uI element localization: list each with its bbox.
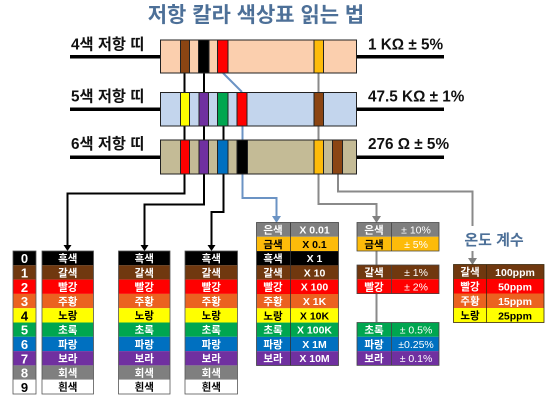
color table 2: 초록 — [135, 324, 154, 336]
tolerance table: 빨강 — [364, 281, 384, 293]
color table 3: 갈색 — [202, 266, 221, 279]
connector lines: blue multiplier — [223, 73, 281, 223]
color table 3: 보라 — [202, 352, 221, 365]
color table 2: 흰색 — [135, 382, 154, 394]
tolerance table: ± 2% — [404, 281, 428, 293]
multiplier table: X 10K — [300, 310, 330, 322]
color table 2: 주황 — [135, 296, 154, 308]
tolerance table: 초록 — [364, 324, 384, 336]
color table 1: 노랑 — [58, 310, 78, 322]
tolerance table: 파랑 — [364, 338, 384, 351]
6-band resistor — [70, 140, 444, 174]
color table 3: 노랑 — [202, 310, 221, 322]
digit column — [13, 251, 36, 395]
color table 3: 초록 — [202, 324, 221, 336]
6-band value: 276 Ω ± 5% — [368, 136, 449, 153]
temperature coefficient table: 25ppm — [498, 310, 532, 322]
color table 2: 흑색 — [135, 252, 154, 265]
color table 3 — [185, 251, 238, 394]
multiplier table: 초록 — [263, 325, 283, 337]
digit column: 9 — [21, 380, 28, 395]
title: 저항 칼라 색상표 읽는 법 — [148, 4, 364, 27]
tolerance table: ± 1% — [404, 267, 428, 279]
multiplier table: X 1K — [303, 296, 327, 308]
multiplier table: 빨강 — [263, 282, 283, 294]
tolerance table: 금색 — [364, 239, 384, 251]
connector lines: gray tolerance — [318, 73, 381, 322]
color table 1 — [42, 251, 94, 394]
color table 1: 주황 — [58, 296, 78, 308]
4-band label: 4색 저항 띠 — [71, 36, 144, 54]
tolerance table: ± 10% — [401, 224, 431, 236]
5-band resistor — [70, 92, 444, 126]
tolerance table: ± 0.5% — [400, 324, 432, 336]
tolerance table: 갈색 — [364, 266, 384, 279]
tolerance table: 은색 — [364, 224, 384, 236]
color table 1: 흑색 — [58, 252, 77, 265]
digit column: 2 — [21, 280, 28, 295]
color table 1: 흰색 — [58, 382, 77, 394]
color table 1: 파랑 — [58, 338, 78, 351]
tolerance table: ±0.25% — [398, 339, 434, 351]
multiplier table: X 1 — [307, 253, 323, 265]
temperature coefficient table: 50ppm — [498, 282, 532, 294]
multiplier table: X 10 — [304, 267, 325, 279]
6-band label: 6색 저항 띠 — [71, 136, 144, 153]
temperature coefficient table: 15ppm — [498, 296, 532, 308]
multiplier table: X 10M — [299, 353, 330, 365]
color table 3: 흰색 — [202, 382, 221, 394]
color table 3: 파랑 — [202, 338, 221, 351]
color table 1: 갈색 — [58, 266, 77, 279]
color table 3: 빨강 — [202, 282, 221, 294]
5-band value: 47.5 KΩ ± 1% — [368, 88, 465, 106]
multiplier table: X 100 — [301, 282, 328, 294]
digit column: 6 — [21, 337, 28, 352]
color table 2: 노랑 — [135, 310, 154, 322]
multiplier table: 은색 — [263, 224, 283, 236]
tolerance table — [357, 222, 439, 365]
connector lines: black digit bands — [64, 73, 224, 251]
multiplier table: X 100K — [297, 325, 332, 337]
multiplier table: 흑색 — [263, 252, 283, 265]
multiplier table — [256, 222, 338, 366]
tolerance table: ± 5% — [404, 239, 428, 251]
4-band value: 1 KΩ ± 5% — [368, 36, 443, 54]
multiplier table: 파랑 — [263, 338, 283, 351]
color table 2: 빨강 — [135, 282, 154, 294]
tolerance table: 보라 — [364, 352, 384, 365]
temperature coefficient table: 100ppm — [495, 267, 535, 279]
digit column: 4 — [21, 308, 29, 323]
5-band label: 5색 저항 띠 — [71, 88, 144, 106]
temperature coefficient heading: 온도 계수 — [464, 232, 524, 249]
multiplier table: 노랑 — [263, 310, 283, 322]
color table 2: 갈색 — [135, 266, 154, 279]
color table 1: 초록 — [58, 324, 78, 336]
color table 2: 파랑 — [135, 338, 154, 351]
color table 2: 보라 — [135, 352, 154, 365]
temperature coefficient table: 빨강 — [460, 281, 480, 293]
multiplier table: X 0.01 — [299, 224, 330, 236]
color table 1: 빨강 — [58, 282, 78, 294]
digit column: 0 — [21, 251, 28, 266]
tolerance table: ± 0.1% — [400, 353, 432, 365]
multiplier table: X 1M — [302, 339, 327, 351]
color table 1: 회색 — [58, 366, 77, 379]
digit column: 1 — [21, 266, 28, 280]
multiplier table: 금색 — [263, 239, 283, 251]
color table 3: 회색 — [202, 366, 221, 379]
connector lines: gray temperature coefficient — [338, 174, 477, 265]
temperature coefficient table — [454, 264, 544, 322]
multiplier table: 보라 — [263, 352, 283, 365]
color table 1: 보라 — [58, 352, 78, 365]
color table 2: 회색 — [135, 366, 154, 379]
temperature coefficient table: 갈색 — [460, 266, 480, 278]
temperature coefficient table: 주황 — [460, 296, 480, 308]
digit column: 3 — [21, 294, 28, 309]
digit column: 8 — [21, 366, 28, 381]
color table 3: 흑색 — [202, 252, 221, 265]
digit column: 7 — [21, 351, 28, 366]
temperature coefficient table: 노랑 — [460, 310, 480, 322]
multiplier table: 갈색 — [263, 266, 283, 279]
digit column: 5 — [21, 323, 28, 338]
multiplier table: X 0.1 — [302, 239, 327, 251]
color table 3: 주황 — [202, 296, 221, 308]
multiplier table: 주황 — [263, 296, 283, 308]
4-band resistor — [70, 40, 444, 73]
color table 2 — [118, 251, 170, 394]
